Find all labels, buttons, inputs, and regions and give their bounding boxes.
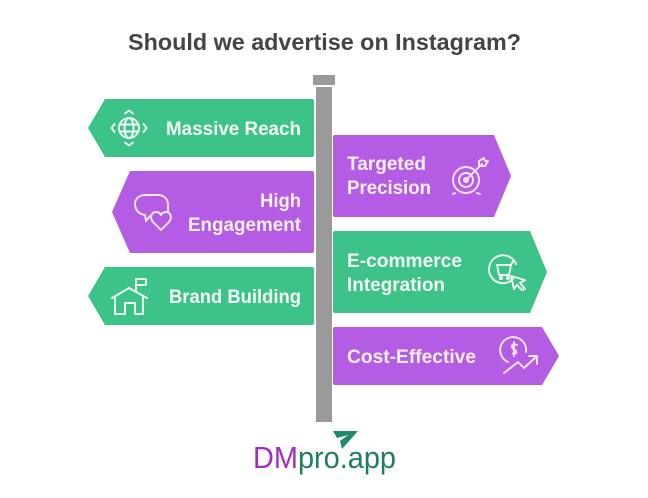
panel: high engagement: Engagement bbox=[188, 215, 302, 236]
label: massive reach: Massive Reach bbox=[166, 119, 301, 140]
label: high engagement: High bbox=[260, 191, 301, 212]
signpost pole bbox=[313, 75, 335, 422]
logo text: DMpro.app bbox=[253, 440, 396, 475]
label: brand building: Brand Building bbox=[169, 287, 301, 308]
logo: DMpro.app bbox=[253, 431, 396, 475]
icon: coin with rising arrow bbox=[500, 337, 537, 373]
icon: shopping cart with cursor bbox=[489, 255, 525, 290]
panel: high engagement bbox=[112, 171, 314, 253]
title: Should we advertise on Instagram? bbox=[128, 29, 521, 55]
panel: massive reach bbox=[88, 99, 314, 157]
label: e-commerce integration: E-commerce bbox=[347, 251, 462, 272]
label: cost-effective: Cost-Effective bbox=[347, 347, 476, 368]
icon: paper plane bbox=[333, 431, 358, 449]
panel: e-commerce integration bbox=[333, 231, 547, 313]
panel: e-commerce integration: Integration bbox=[347, 275, 445, 296]
icon: house with flag bbox=[112, 279, 147, 314]
panel: targeted precision: Precision bbox=[347, 178, 431, 199]
icon: globe with arrows bbox=[112, 110, 146, 146]
label: targeted precision: Targeted bbox=[347, 154, 426, 175]
panel: brand building bbox=[88, 267, 314, 325]
panel: targeted precision bbox=[333, 135, 511, 217]
panel: cost-effective bbox=[333, 327, 559, 385]
icon: target with arrow bbox=[453, 158, 488, 194]
icon: speech bubble with heart bbox=[135, 195, 171, 230]
